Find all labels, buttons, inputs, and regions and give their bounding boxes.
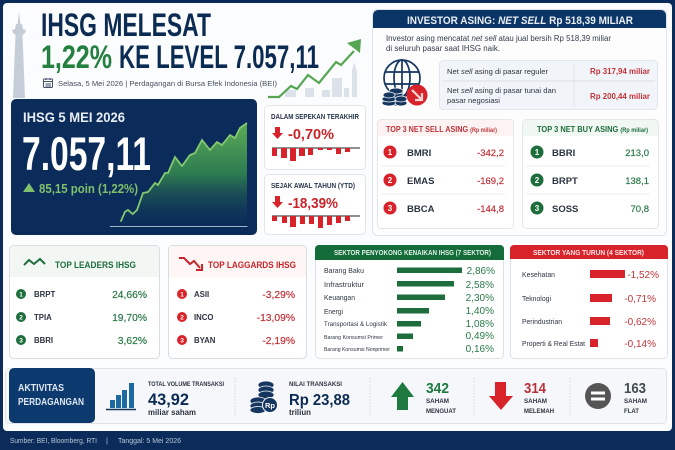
sector values (624, 270, 659, 350)
table: top 3 net sell: BBCA (407, 204, 435, 215)
mini bar chart (272, 148, 360, 161)
sector values: 1,40% (466, 306, 494, 317)
table: top 3 net buy: 70,8 (630, 204, 649, 215)
icon: equal sign (585, 383, 611, 409)
sector labels: Keuangan (324, 293, 355, 302)
sector labels: Kesehatan (522, 270, 555, 279)
sector values: 1,08% (466, 319, 494, 330)
stat: stocks flat: 163 (624, 380, 646, 397)
icon: zigzag up (24, 259, 45, 265)
table: top 3 net sell: BMRI (407, 148, 431, 159)
panel: foreign investors (372, 10, 666, 236)
card: weekly change: DALAM SEPEKAN TERAKHIR (271, 112, 359, 121)
area chart (110, 123, 248, 226)
panel: top leaders: TOP LEADERS IHSG (55, 260, 136, 271)
sector labels (522, 270, 585, 348)
card: year to date: -18,39% (288, 195, 338, 212)
table: top 3 net buy: 2 (535, 176, 540, 185)
sector labels (324, 266, 390, 353)
sector labels: Transportasi & Logistik (324, 321, 388, 328)
stat: transaction value: Rp 23,88 (289, 392, 350, 409)
table: top 3 net buy: 3 (535, 204, 540, 213)
table: net sell by market: Rp 200,44 miliar (590, 92, 650, 101)
table: top 3 net sell: 1 (388, 148, 393, 157)
table: net sell by market: pasar negosiasi (447, 96, 500, 105)
sector values: 2,86% (467, 266, 495, 277)
table: top 3 net buy: 213,0 (625, 148, 649, 159)
stat: transaction value: NILAI TRANSAKSI (289, 381, 342, 388)
sector values: 0,49% (466, 331, 494, 342)
stat: stocks down (524, 380, 554, 415)
heading: IHSG 5 Mei 2026: IHSG 5 MEI 2026 (23, 109, 125, 125)
panel: top leaders: 24,66% (112, 290, 147, 301)
sector labels: Teknologi (522, 294, 551, 303)
icon: coins with Rp (250, 381, 278, 414)
table: net sell by market (440, 60, 658, 110)
sector labels: Perindustrian (522, 317, 562, 326)
panel: top laggards: -3,29% (262, 290, 295, 301)
sector labels: Barang Konsumsi Primer (324, 335, 383, 341)
sector values (466, 266, 495, 355)
icon: globe with coins and down arrow (382, 60, 428, 106)
panel: falling sectors (510, 245, 668, 358)
table: top 3 net sell (378, 120, 514, 228)
card: year to date (264, 174, 366, 234)
panel: IHSG value (11, 99, 257, 235)
table: top 3 net sell: TOP 3 NET SELL ASING (Rp miliar) (386, 125, 497, 134)
label box (9, 368, 95, 423)
panel: falling sectors: SEKTOR YANG TURUN (4 SEKTOR) (533, 248, 644, 257)
stat: stocks down: 314 (524, 380, 547, 397)
footer: sources (10, 436, 181, 445)
panel: top leaders: 1 (19, 292, 23, 298)
stat: total volume (148, 381, 224, 417)
sector values: -1,52% (627, 270, 659, 281)
sector labels: Barang Konsumsi Nonprimer (324, 347, 390, 353)
panel: top leaders: TPIA (34, 313, 52, 322)
icon: down arrow (272, 127, 283, 139)
sector values: 0,16% (466, 344, 494, 355)
footer: sources: Tanggal: 5 Mei 2026 (118, 436, 181, 445)
stat: total volume: TOTAL VOLUME TRANSAKSI (148, 381, 224, 388)
label box: PERDAGANGAN (18, 397, 84, 408)
table: net sell by market: Rp 317,94 miliar (590, 67, 650, 76)
panel: top laggards: TOP LAGGARDS IHSG (208, 260, 296, 271)
panel: top leaders: 3 (19, 338, 23, 344)
sector labels: Properti & Real Estat (522, 339, 585, 348)
stat: stocks up (426, 380, 456, 415)
table: top 3 net buy: 138,1 (625, 176, 649, 187)
panel: top leaders: 2 (19, 314, 23, 322)
panel: top laggards: 1 (180, 292, 184, 298)
panel: top laggards (168, 246, 306, 358)
table: top 3 net sell: EMAS (407, 176, 434, 187)
panel: top laggards: -2,19% (262, 336, 295, 347)
icon: coins with Rp: Rp (265, 401, 275, 410)
table: net sell by market: Net sell asing di pasar reguler (447, 67, 549, 76)
header text: INVESTOR ASING: NET SELL Rp 518,39 MILIAR (407, 15, 633, 27)
panel: top laggards: ASII (194, 290, 209, 299)
label box: AKTIVITAS (18, 383, 64, 394)
description: Investor asing mencatat net sell atau jual bersih Rp 518,39 miliar (386, 34, 611, 43)
sector labels: Barang Baku (324, 266, 364, 275)
panel: top leaders (10, 246, 160, 358)
value: 7.057,11: 7.057,11 (22, 127, 151, 180)
panel: top leaders: BRPT (34, 290, 55, 299)
stat: stocks down: MELEMAH (524, 408, 554, 415)
stat: total volume: 43,92 (148, 390, 189, 409)
table: top 3 net sell: 3 (388, 204, 393, 213)
card: weekly change (264, 106, 366, 170)
icon: calendar (44, 78, 52, 88)
panel: top leaders: 3,62% (118, 336, 147, 347)
description: di seluruh pasar saat IHSG naik. (386, 44, 500, 53)
table: top 3 net sell: -169,2 (477, 176, 504, 187)
stat: total volume: miliar saham (148, 408, 196, 417)
panel: top laggards: 3 (180, 338, 184, 344)
footer: sources: Sumber: BEI, Bloomberg, RTI (10, 436, 97, 445)
icon: bar chart (106, 383, 136, 410)
header rising chart with skyline (268, 39, 361, 97)
stat: stocks up: SAHAM (426, 398, 449, 405)
footer: sources: | (106, 436, 108, 445)
stat: stocks flat: SAHAM (624, 398, 647, 405)
icon: up arrow (391, 382, 414, 410)
sector labels: Energi (324, 307, 343, 316)
stat: stocks down: SAHAM (524, 398, 547, 405)
table: top 3 net sell: -342,2 (477, 148, 504, 159)
sector labels: Infrastruktur (324, 280, 364, 289)
change: 85,15 poin: 85,15 poin (1,22%) (39, 182, 138, 196)
icon: down arrow (272, 196, 283, 208)
table: top 3 net buy (522, 120, 658, 228)
description (386, 34, 611, 53)
stat: transaction value: triliun (289, 408, 311, 417)
table: top 3 net buy: SOSS (552, 204, 578, 215)
sector values: 2,30% (466, 293, 494, 304)
table: top 3 net buy: TOP 3 NET BUY ASING (Rp miliar) (537, 125, 648, 134)
panel: trading activity (6, 368, 666, 424)
table: top 3 net buy: BBRI (552, 148, 575, 159)
title (41, 7, 319, 75)
table: net sell by market: Net sell asing di pasar tunai dan (447, 86, 556, 95)
stat: stocks flat (624, 380, 647, 415)
card: weekly change: -0,70% (288, 126, 334, 143)
sector values: -0,62% (624, 317, 656, 328)
stat: stocks flat: FLAT (624, 408, 639, 415)
panel: top leaders: BBRI (34, 336, 53, 345)
stat: stocks up: MENGUAT (426, 408, 456, 415)
panel: top laggards: -13,09% (257, 313, 295, 324)
panel: rising sectors (315, 245, 504, 358)
panel: rising sectors: SEKTOR PENYOKONG KENAIKAN IHSG (7 SEKTOR) (334, 248, 491, 257)
table: top 3 net buy: BRPT (552, 176, 578, 187)
table: top 3 net sell: -144,8 (477, 204, 504, 215)
bar chart (397, 268, 462, 352)
card: year to date: SEJAK AWAL TAHUN (YTD) (271, 181, 355, 190)
panel: top laggards: 2 (180, 314, 184, 322)
title: KE LEVEL 7.057,11 (119, 39, 319, 75)
table: top 3 net buy: 1 (535, 148, 540, 157)
panel header (373, 10, 666, 28)
stat: stocks up: 342 (426, 380, 449, 397)
sector values: 2,58% (466, 280, 494, 291)
icon: down arrow (489, 382, 513, 410)
table: top 3 net sell: 2 (388, 176, 393, 185)
sector values: -0,71% (624, 294, 656, 305)
mini bar chart (272, 216, 360, 228)
panel: top leaders: 19,70% (112, 313, 147, 324)
bar chart (590, 270, 625, 347)
title: IHSG MELESAT (41, 7, 211, 43)
stat: transaction value (289, 381, 350, 417)
sector values: -0,14% (624, 339, 656, 350)
date line: Selasa, 5 Mei 2026 | Perdagangan di Bursa Efek Indonesia (BEI) (58, 79, 277, 88)
panel: top laggards: BYAN (194, 336, 216, 345)
panel: top laggards: INCO (194, 313, 214, 322)
title: 1,22% (41, 39, 112, 75)
icon: Monas monument (12, 12, 26, 98)
icon: zigzag down (179, 258, 202, 270)
